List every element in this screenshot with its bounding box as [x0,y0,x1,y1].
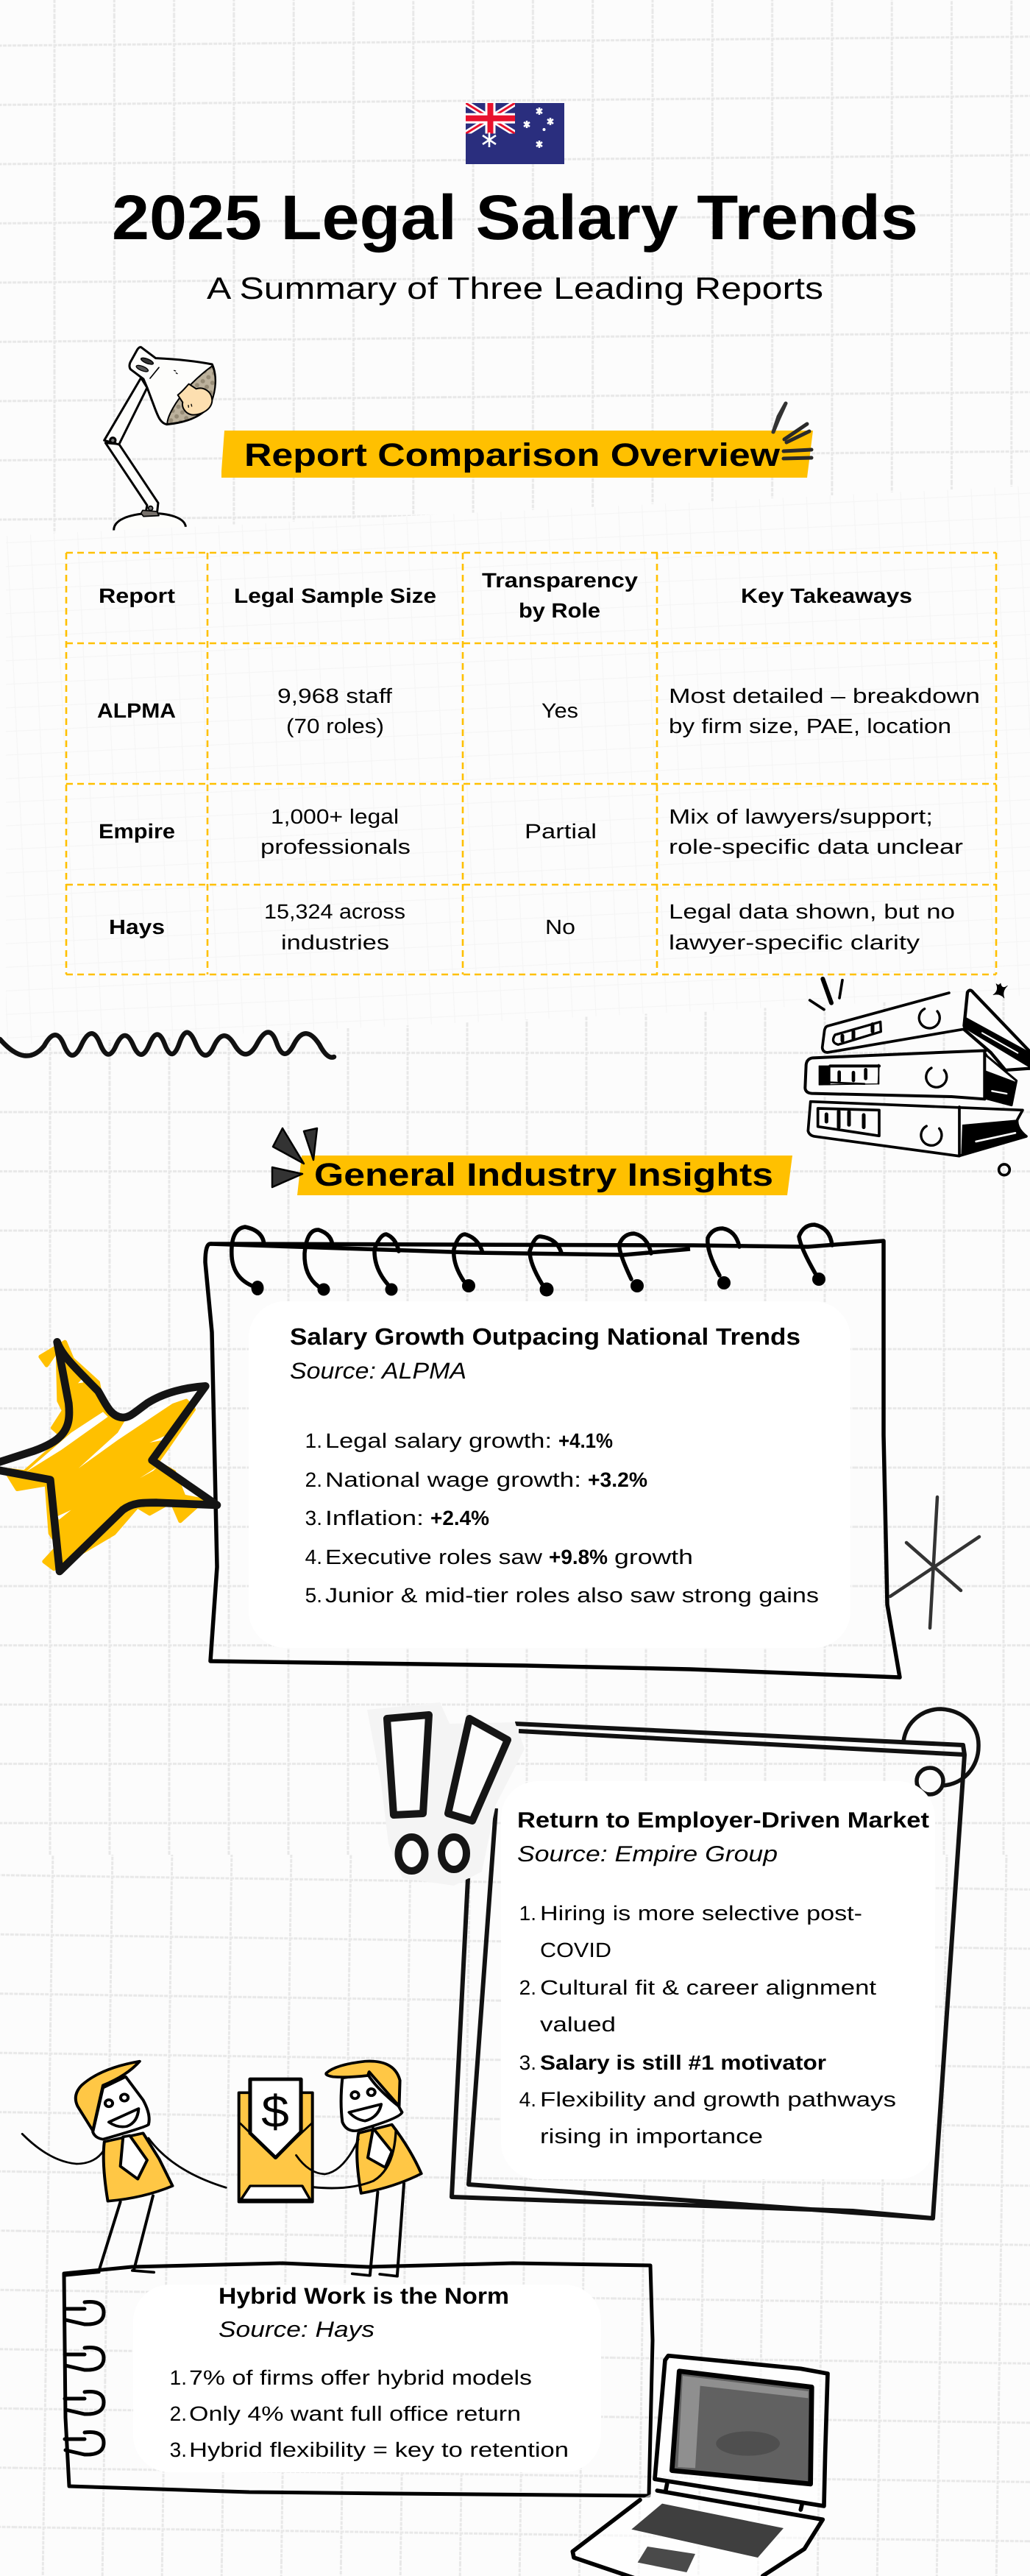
envelope with dollar note: $ [260,2089,291,2141]
table row: Hays [109,900,955,954]
table row: Empire: Mix of lawyers/support; [669,805,933,828]
heading: Report Comparison Overview: Report Comparison Overview [244,437,781,473]
icon: hand-drawn asterisk [890,1497,979,1628]
numbered list: 4. [519,2088,536,2111]
card heading: Hybrid Work is the Norm [219,2283,509,2309]
numbered list: Hiring is more selective post- [540,1902,862,1925]
envelope with dollar note [239,2079,313,2202]
exclamation mark backing patch [367,1702,525,1886]
table row: Hays: Legal data shown, but no [669,900,955,923]
heading: Report Comparison Overview [221,403,813,478]
icon: desk lamp [104,347,216,532]
table row: Empire [99,805,963,858]
numbered list: 2. [519,1976,536,1999]
table row: Hays: 15,324 across [264,900,405,923]
numbered list: rising in importance [540,2125,763,2148]
illustration: two people exchanging salary envelope [22,2061,422,2276]
table row: ALPMA: 9,968 staff [277,684,392,707]
numbered list: Cultural fit & career alignment [540,1976,876,1999]
comparison table [66,553,996,974]
title: 2025 Legal Salary Trends [112,183,918,253]
right person [296,2061,422,2276]
numbered list: 2. [305,1468,322,1491]
table row: Hays: lawyer-specific clarity [669,931,920,954]
numbered list: Salary is still #1 motivator [540,2051,826,2074]
table row: ALPMA [97,684,980,737]
panel: salary growth notebook card [205,1225,900,1677]
table row: Empire: professionals [260,835,411,858]
card heading: Return to Employer-Driven Market [517,1808,929,1833]
table row: Empire: 1,000+ legal [271,805,399,828]
numbered list: Only 4% want full office return [189,2402,521,2425]
table row: Hays: Hays [109,916,165,938]
decorative zigzag line [0,1032,334,1058]
numbered list: Junior & mid-tier roles also saw strong gains [325,1584,819,1607]
panel: hybrid work notebook card [64,2263,653,2496]
numbered list [170,2366,569,2461]
numbered list: 5. [305,1584,322,1607]
numbered list: 1. [170,2366,187,2389]
numbered list: +9.8% [549,1546,608,1568]
icon: yellow scribbled star [0,1342,217,1571]
table row: Empire: role-specific data unclear [669,835,963,858]
panel background: tilted fine-grid sheet behind the table [0,486,1030,1045]
table header row: Report [99,584,175,607]
table row: ALPMA: Most detailed – breakdown [669,684,980,707]
icon: Australian flag [466,103,564,164]
bottom binder [808,1102,1026,1156]
white content box [133,2285,601,2472]
card source: Source: ALPMA [290,1358,466,1384]
numbered list: growth [614,1546,693,1568]
numbered list: +3.2% [588,1468,647,1491]
top binder [823,990,1030,1070]
numbered list: 3. [170,2438,187,2461]
table row: Empire: Partial [525,820,597,843]
numbered list: Legal salary growth: [325,1429,552,1452]
numbered list: 4. [305,1546,322,1568]
double-line paper frame [452,1724,965,2218]
table row: Empire: Empire [99,820,175,843]
notebook spiral rings [232,1225,832,1297]
table row: ALPMA: ALPMA [97,699,176,722]
subtitle: A Summary of Three Leading Reports [207,271,823,305]
illustration: laptop [572,2356,828,2576]
table row: ALPMA: (70 roles) [286,715,384,737]
table header row [99,569,912,622]
heading: General Industry Insights: General Industry Insights [314,1157,773,1193]
white content box [501,1781,935,2179]
numbered list: 3. [305,1507,322,1529]
icon: stack of binders [805,979,1030,1175]
numbered list: Flexibility and growth pathways [540,2088,896,2111]
heading: General Industry Insights [272,1128,792,1195]
table header row: Key Takeaways [741,584,912,607]
table header row: by Role [519,599,600,622]
numbered list: National wage growth: [325,1468,581,1491]
card heading: Salary Growth Outpacing National Trends [290,1323,800,1350]
numbered list [519,1902,896,2148]
left person [22,2062,226,2276]
table header row: Transparency [482,569,638,592]
numbered list: valued [540,2013,616,2036]
white content box [249,1301,850,1648]
icon: double exclamation marks [387,1715,508,1871]
numbered list: 2. [170,2402,187,2425]
middle binder [805,1050,1017,1105]
table row: Hays: No [545,916,575,938]
card source: Source: Hays [219,2318,374,2342]
table row: ALPMA: by firm size, PAE, location [669,715,951,737]
table row: ALPMA: Yes [541,699,578,722]
numbered list: Inflation: [325,1507,424,1529]
table row: Hays: industries [281,931,389,954]
notebook frame [205,1241,900,1677]
numbered list: Hybrid flexibility = key to retention [189,2438,569,2461]
numbered list: COVID [540,1939,611,1961]
notebook frame [64,2263,653,2496]
panel: employer-driven market card [367,1702,979,2218]
card source: Source: Empire Group [517,1842,778,1866]
numbered list: +2.4% [430,1507,489,1529]
numbered list: 7% of firms offer hybrid models [189,2366,532,2389]
table header row: Legal Sample Size [234,584,436,607]
numbered list: +4.1% [558,1429,613,1452]
numbered list [305,1429,819,1607]
numbered list: 1. [305,1429,322,1452]
notebook binding rings [65,2302,104,2455]
numbered list: 3. [519,2051,536,2074]
paper clip ring [903,1709,979,1794]
numbered list: 1. [519,1902,536,1925]
numbered list: Executive roles saw [325,1546,543,1568]
